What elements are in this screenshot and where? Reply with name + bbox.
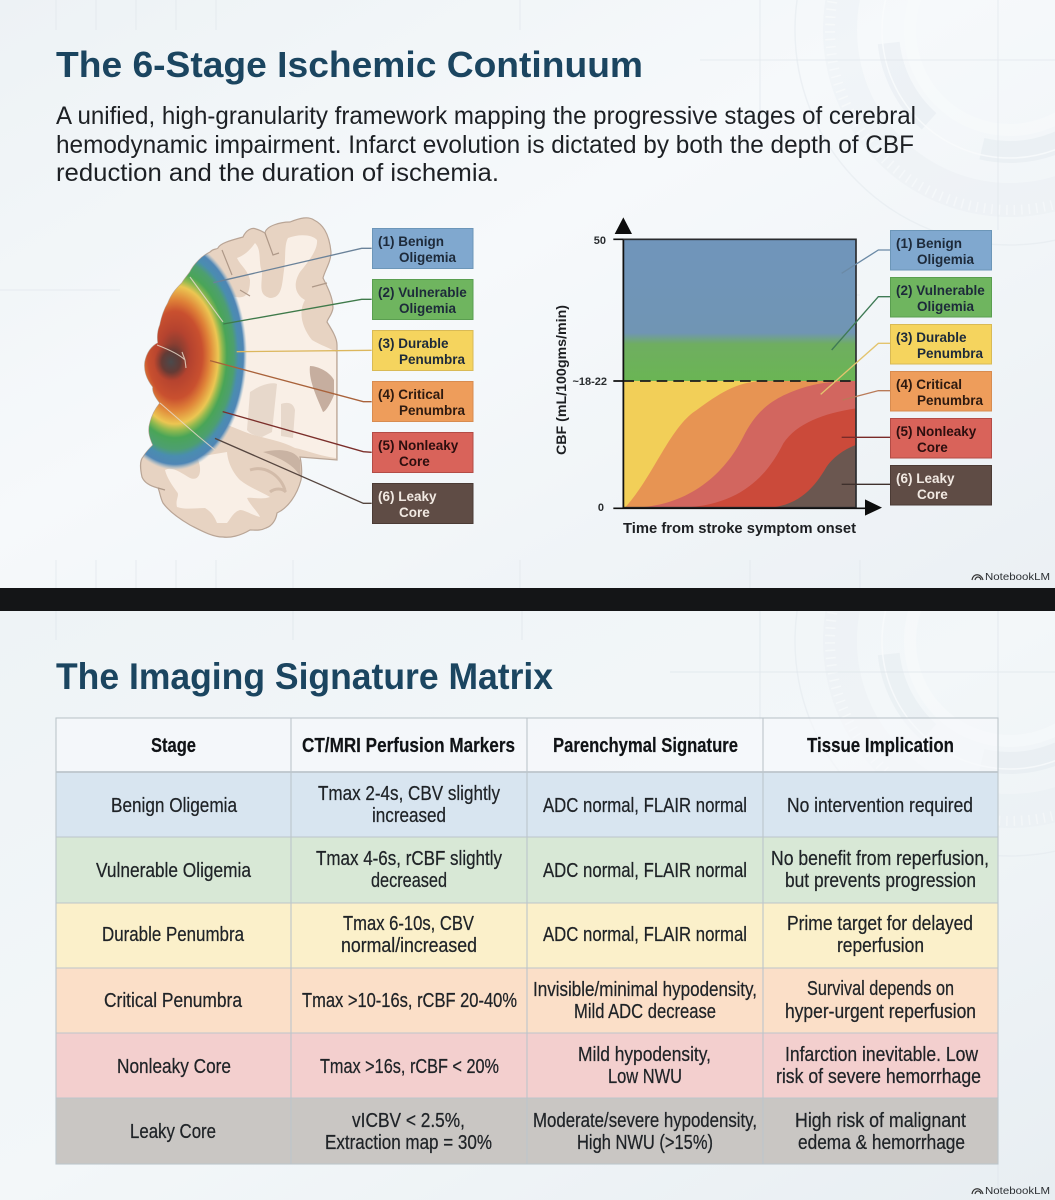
row: nonleaky core: Mild hypodensity,: [578, 1044, 711, 1066]
label: critical penumbra: Penumbra: [917, 393, 984, 408]
label: leaky core: (6) Leaky: [378, 489, 437, 504]
row: critical penumbra: Survival depends on: [807, 978, 954, 1000]
legend: chart stage labels: [890, 230, 992, 505]
row: leaky core: edema & hemorrhage: [798, 1132, 965, 1154]
label: benign oligemia: (1) Benign: [378, 234, 444, 249]
row: vulnerable oligemia: but prevents progression: [785, 870, 976, 892]
label: nonleaky core: [372, 432, 473, 472]
threshold dashed line: [623, 378, 856, 383]
label: vulnerable oligemia: Oligemia: [917, 299, 975, 314]
axis tick labels: [572, 235, 607, 514]
text block: framework description: hemodynamic impairment. Infarct evolution is dictated by both the depth of CBF: [56, 131, 914, 159]
x axis title: Time from stroke symptom onset: [623, 521, 856, 537]
row: nonleaky core: Infarction inevitable. Low: [785, 1044, 978, 1066]
row: nonleaky core: [56, 1033, 998, 1098]
label: vulnerable oligemia: Oligemia: [399, 301, 457, 316]
footer brand: NotebookLM: NotebookLM: [985, 1185, 1050, 1197]
label: nonleaky core: (5) Nonleaky: [896, 424, 977, 439]
table header row: CT/MRI Perfusion Markers: [302, 735, 515, 757]
row: critical penumbra: Mild ADC decrease: [574, 1001, 716, 1023]
label: durable penumbra: Penumbra: [399, 352, 466, 367]
panel: ischemic continuum slide: [0, 0, 1055, 588]
row: durable penumbra: ADC normal, FLAIR normal: [543, 924, 747, 946]
label: critical penumbra: (4) Critical: [896, 377, 962, 392]
row: benign oligemia: ADC normal, FLAIR normal: [543, 795, 747, 817]
label: benign oligemia: (1) Benign: [896, 236, 962, 251]
label: vulnerable oligemia: (2) Vulnerable: [896, 283, 985, 298]
row: benign oligemia: Benign Oligemia: [111, 795, 238, 817]
table: imaging signature by stage: [56, 718, 998, 1164]
row: durable penumbra: normal/increased: [341, 935, 477, 957]
row: nonleaky core: Nonleaky Core: [117, 1056, 231, 1078]
label: critical penumbra: Penumbra: [399, 403, 466, 418]
row: leaky core: High NWU (>15%): [577, 1132, 713, 1154]
label: leaky core: Core: [917, 487, 948, 502]
label: vulnerable oligemia: [890, 278, 992, 317]
title: imaging signature matrix: The Imaging Signature Matrix: [56, 656, 553, 697]
label: durable penumbra: (3) Durable: [896, 330, 967, 345]
y axis title: CBF (mL/100gms/min): [553, 305, 569, 455]
chart: CBF over time from stroke onset: [553, 217, 882, 537]
label: leaky core: [372, 484, 473, 524]
label: nonleaky core: (5) Nonleaky: [378, 438, 459, 453]
row: leaky core: vICBV < 2.5%,: [352, 1110, 465, 1132]
row: leaky core: Moderate/severe hypodensity,: [533, 1110, 757, 1132]
legend: brain stage labels: [372, 228, 473, 524]
label: critical penumbra: (4) Critical: [378, 387, 444, 402]
row: benign oligemia: increased: [372, 805, 446, 827]
label: leaky core: [890, 466, 992, 505]
brain diagram with perfusion heat map: [140, 217, 338, 538]
row: critical penumbra: [56, 968, 998, 1033]
label: critical penumbra: [372, 382, 473, 422]
panel: imaging signature matrix slide: [0, 426, 1055, 1200]
row: leaky core: [56, 1098, 998, 1164]
label: vulnerable oligemia: (2) Vulnerable: [378, 285, 467, 300]
row: durable penumbra: Tmax 6-10s, CBV: [343, 913, 475, 935]
table header row: Stage: [151, 735, 196, 757]
text block: framework description: reduction and the duration of ischemia.: [56, 159, 499, 187]
row: durable penumbra: [56, 903, 998, 968]
axis tick labels: ~18-22: [572, 376, 607, 388]
label: nonleaky core: [890, 418, 992, 458]
row: leaky core: Leaky Core: [130, 1121, 216, 1143]
label: benign oligemia: Oligemia: [399, 250, 457, 265]
label: leaky core: Core: [399, 505, 430, 520]
row: vulnerable oligemia: ADC normal, FLAIR normal: [543, 860, 747, 882]
row: critical penumbra: Invisible/minimal hypodensity,: [533, 979, 757, 1001]
table header row: [56, 718, 998, 772]
row: critical penumbra: Critical Penumbra: [104, 990, 243, 1012]
label: leaky core: (6) Leaky: [896, 471, 955, 486]
label: vulnerable oligemia: [372, 280, 473, 320]
label: durable penumbra: [890, 324, 992, 364]
axis tick labels: 50: [594, 235, 606, 247]
title: 6-stage continuum: The 6-Stage Ischemic Continuum: [56, 44, 643, 85]
callout lines: brain to labels: [210, 248, 372, 503]
row: critical penumbra: hyper-urgent reperfusion: [785, 1001, 976, 1023]
label: durable penumbra: [372, 330, 473, 370]
label: durable penumbra: Penumbra: [917, 346, 984, 361]
table header row: Tissue Implication: [807, 735, 954, 757]
row: critical penumbra: Tmax >10-16s, rCBF 20-40%: [302, 990, 517, 1012]
label: benign oligemia: [372, 228, 473, 268]
row: vulnerable oligemia: [56, 837, 998, 903]
label: durable penumbra: (3) Durable: [378, 336, 449, 351]
table header row: Parenchymal Signature: [553, 735, 738, 757]
black divider band: [0, 588, 1055, 611]
label: nonleaky core: Core: [399, 454, 430, 469]
footer brand: NotebookLM: NotebookLM: [985, 571, 1050, 583]
row: nonleaky core: Low NWU: [608, 1066, 682, 1088]
row: benign oligemia: No intervention required: [787, 795, 973, 817]
row: vulnerable oligemia: Tmax 4-6s, rCBF slightly: [316, 848, 502, 870]
text block: framework description: [56, 102, 916, 187]
row: durable penumbra: Prime target for delayed: [787, 913, 973, 935]
text block: framework description: A unified, high-granularity framework mapping the progressive stages of cerebral: [56, 102, 916, 130]
chart axes: [613, 217, 882, 516]
row: durable penumbra: reperfusion: [837, 935, 924, 957]
axis tick labels: 0: [598, 502, 604, 514]
row: vulnerable oligemia: No benefit from reperfusion,: [771, 848, 989, 870]
row: durable penumbra: Durable Penumbra: [102, 924, 245, 946]
row: nonleaky core: risk of severe hemorrhage: [776, 1066, 981, 1088]
row: leaky core: Extraction map = 30%: [325, 1132, 492, 1154]
row: benign oligemia: [56, 772, 998, 837]
label: critical penumbra: [890, 372, 992, 411]
chart area: stage layers: [623, 239, 856, 508]
row: leaky core: High risk of malignant: [795, 1110, 966, 1132]
row: benign oligemia: Tmax 2-4s, CBV slightly: [318, 783, 500, 805]
label: benign oligemia: Oligemia: [917, 252, 975, 267]
row: vulnerable oligemia: decreased: [371, 870, 447, 892]
callout lines: chart to labels: [821, 250, 890, 484]
row: nonleaky core: Tmax >16s, rCBF < 20%: [320, 1056, 499, 1078]
label: benign oligemia: [890, 230, 992, 270]
row: vulnerable oligemia: Vulnerable Oligemia: [96, 860, 252, 882]
label: nonleaky core: Core: [917, 440, 948, 455]
